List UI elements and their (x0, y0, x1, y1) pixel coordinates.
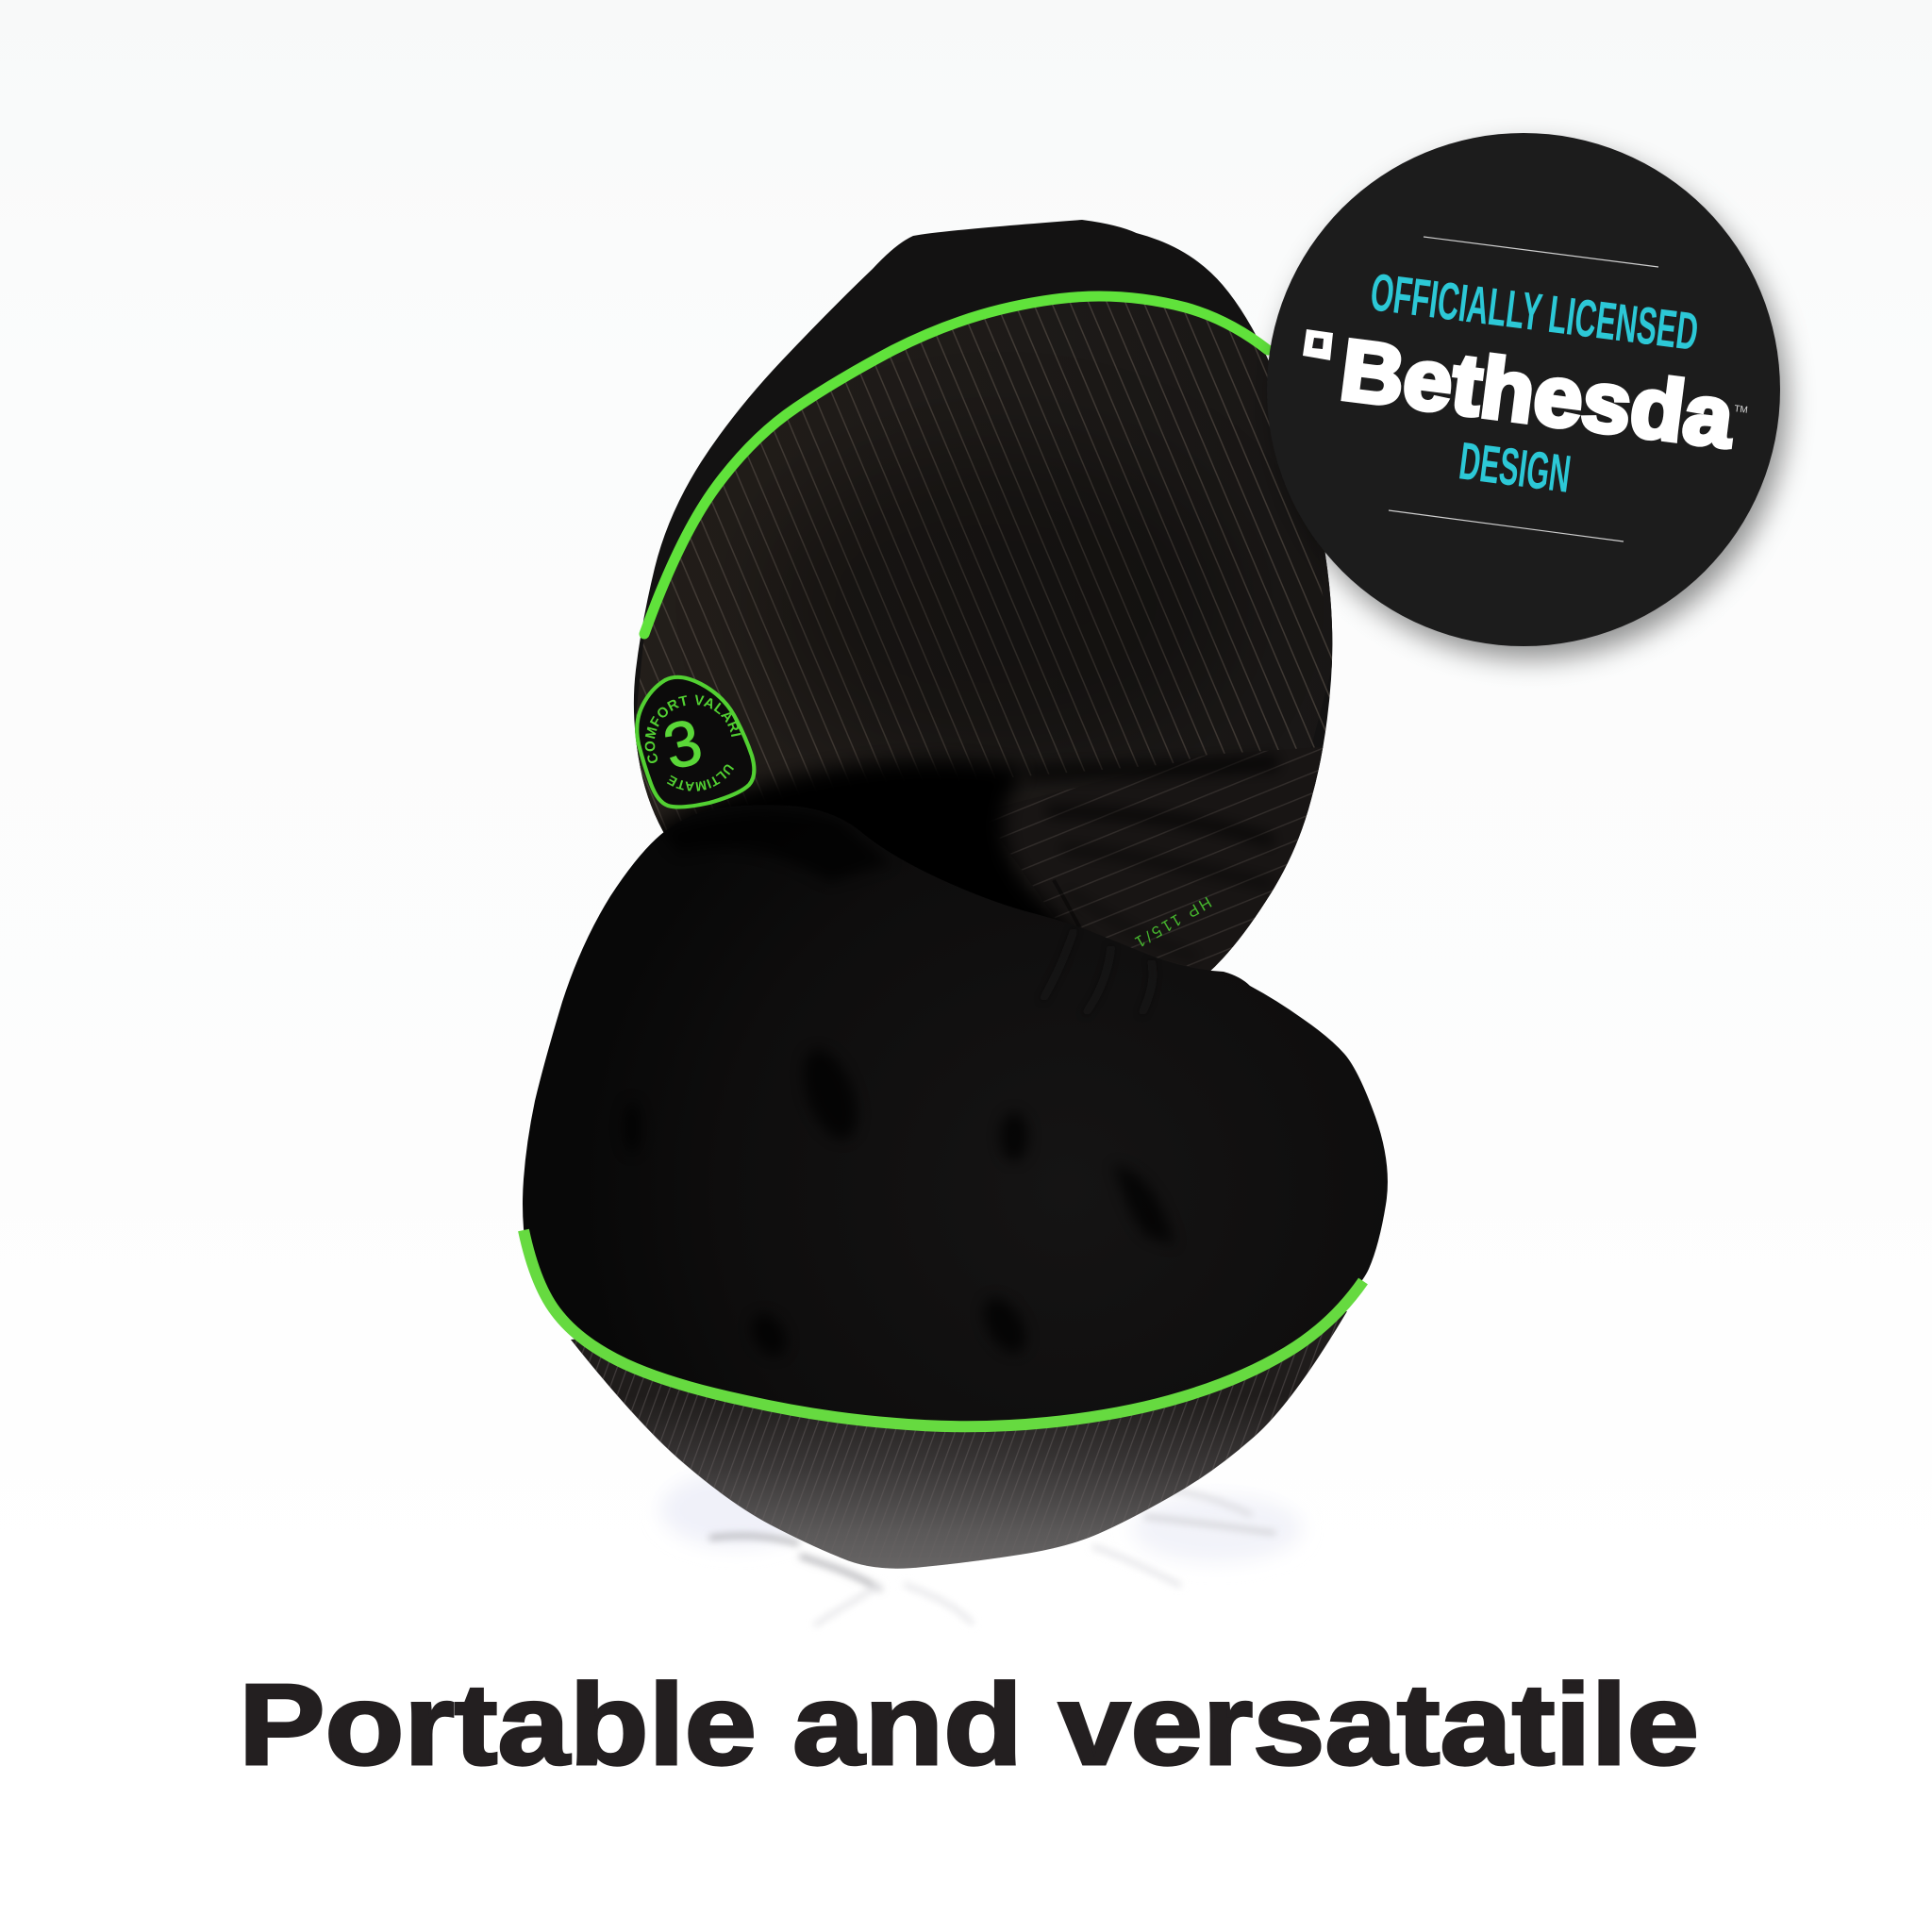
Bethesda wordmark: Bethesda (1335, 323, 1740, 466)
trademark: TM (1734, 404, 1748, 416)
embroidered emblem: COMFORT VALARI (645, 694, 741, 763)
printed size label: HP 115/1 (1129, 893, 1215, 953)
badge bottom rule (1389, 510, 1624, 541)
badge top rule (1424, 237, 1658, 267)
title: Portable and versatatile (239, 1660, 1699, 1789)
embroidered emblem (635, 675, 757, 809)
Bethesda square mark (1303, 329, 1333, 360)
badge: officially licensed Bethesda design (1267, 133, 1780, 646)
upper lobe velvet cap (634, 220, 1332, 983)
pillow: upper lobe (623, 220, 1358, 1000)
badge design line: DESIGN (1456, 430, 1574, 504)
bedding wrinkles (711, 1491, 1274, 1624)
pillow: bottom striped section (571, 1311, 1347, 1569)
upper lobe striped body (623, 296, 1358, 1000)
lower green piping (524, 1230, 1363, 1426)
gathered fold shadows (1027, 750, 1281, 884)
pillow: lower velvet lobe (523, 805, 1388, 1427)
velvet marks (659, 832, 1168, 1349)
embroidered emblem: ULTIMATE (666, 764, 734, 791)
badge disc (1267, 133, 1780, 646)
gathered folds (1042, 929, 1153, 1014)
upper green piping (644, 296, 1268, 634)
embroidered emblem: 3 (657, 706, 708, 784)
